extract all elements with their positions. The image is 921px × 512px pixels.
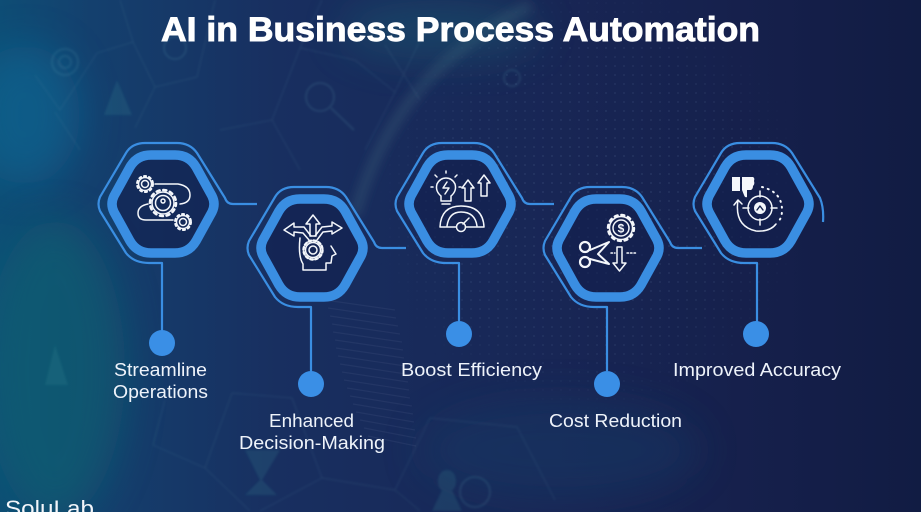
connector dot 3 [446, 321, 472, 347]
hexagon frame 3 [396, 143, 554, 334]
hexagon frame 2 [248, 187, 406, 378]
title: AI in Business Process Automation [161, 11, 760, 49]
label: Enhanced Decision-Making: Decision-Making [239, 433, 385, 453]
label: Cost Reduction: Cost Reduction [549, 411, 682, 431]
step 1: Streamline Operations [98, 143, 257, 402]
icon: scissors, dollar gear and down arrow [580, 215, 636, 271]
connector dot 5 [743, 321, 769, 347]
icon: scissors, dollar gear and down arrow: $ [618, 222, 625, 236]
label: Streamline Operations: Streamline [114, 360, 207, 380]
label: Improved Accuracy: Improved Accuracy [673, 360, 841, 380]
icon: bulb, arrows and gauge [431, 171, 490, 232]
connector dot 1 [149, 330, 175, 356]
step 3: Boost Efficiency [396, 143, 554, 380]
step 2: Enhanced Decision-Making [239, 187, 406, 453]
label: Boost Efficiency: Boost Efficiency [401, 360, 542, 380]
step 5: Improved Accuracy [673, 143, 841, 380]
connector dot 2 [298, 371, 324, 397]
hexagon frame 4 [544, 187, 702, 371]
hexagon frame 1 [98, 143, 257, 334]
label: Streamline Operations: Operations [113, 382, 208, 402]
label: Enhanced Decision-Making: Enhanced [269, 411, 354, 431]
step 4: Cost Reduction [544, 187, 702, 431]
icon: gears on a process path [137, 176, 191, 230]
hexagon frame 5 [694, 143, 823, 334]
connector dot 4 [594, 371, 620, 397]
icon: thumb down and target [732, 177, 782, 231]
icon: head with gear and arrows [284, 215, 342, 270]
